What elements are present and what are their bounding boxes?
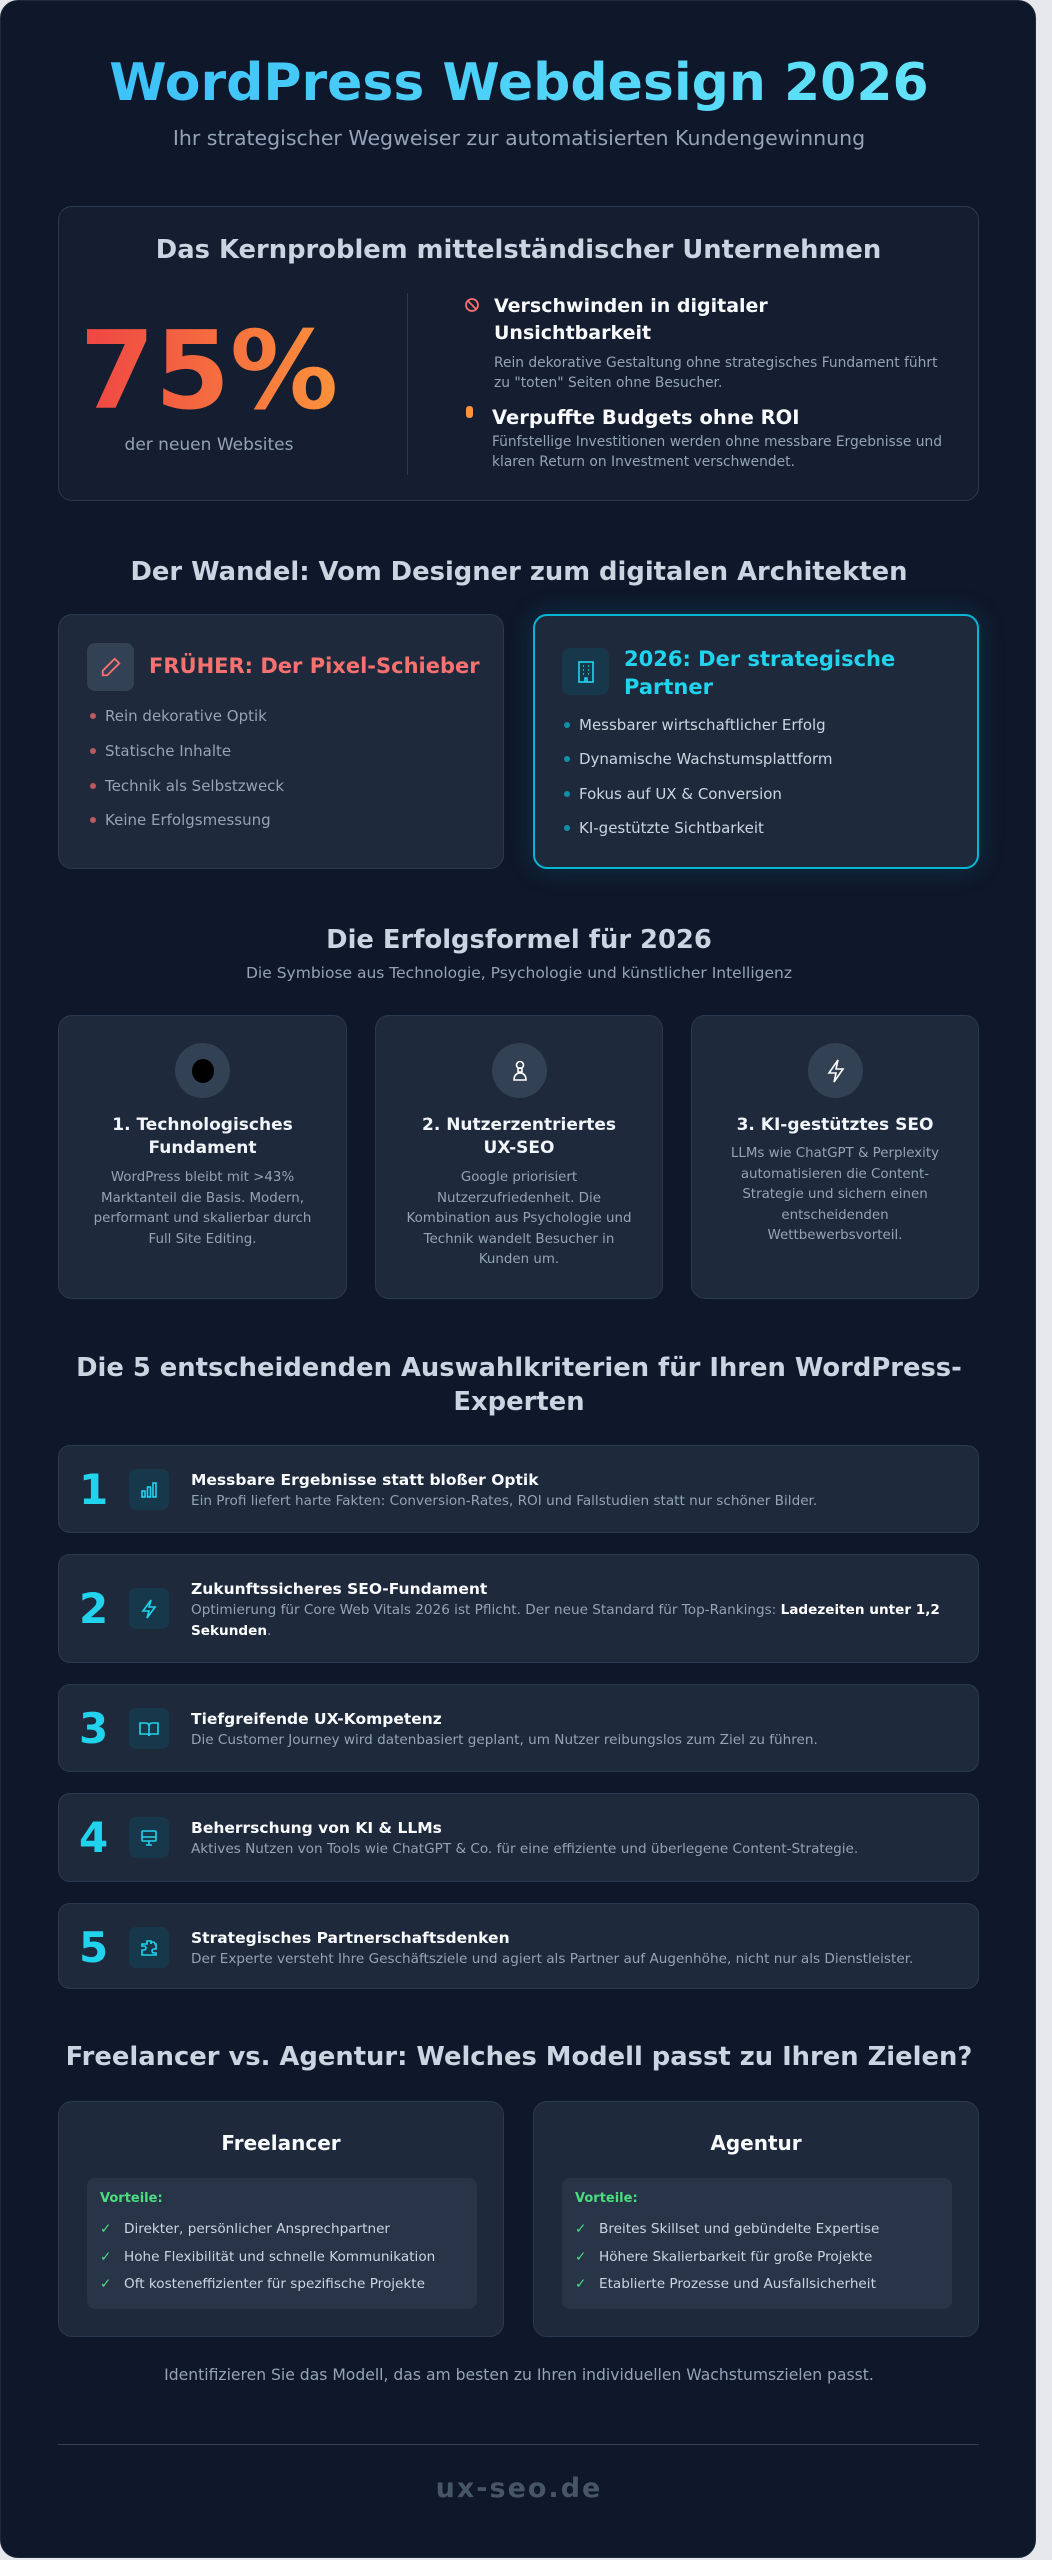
panel: agentur — [533, 2101, 979, 2337]
card: ux-seo — [375, 1015, 663, 1299]
stat: 75%: der neuen Websites — [125, 435, 293, 455]
row 5: Der Experte versteht Ihre Geschäftsziele und agiert als Partner auf Augenhöhe, nicht nur als Dienstleister. — [191, 1951, 913, 1967]
panel: 2026: Messbarer wirtschaftlicher Erfolg — [579, 716, 826, 734]
card: ki-seo: 3. KI-gestütztes SEO — [737, 1115, 933, 1135]
advantages box: Vorteile: — [575, 2191, 638, 2206]
card: ux-seo: 2. Nutzerzentriertes — [422, 1115, 616, 1135]
title: 2026: Der strategische Partner — [624, 647, 895, 699]
icon: monitor — [129, 1817, 169, 1858]
row 5: Strategisches Partnerschaftsdenken — [191, 1929, 510, 1947]
row 2: Zukunftssicheres SEO-Fundament — [191, 1580, 487, 1598]
card: technology: 1. Technologisches — [112, 1115, 293, 1135]
title: WordPress Webdesign 2026 — [109, 53, 929, 113]
row 2 — [58, 1554, 979, 1663]
panel: früher — [58, 614, 504, 869]
advantages box: Höhere Skalierbarkeit für große Projekte — [599, 2249, 872, 2265]
advantages box: Breites Skillset und gebündelte Expertise — [599, 2221, 879, 2237]
row 5 — [58, 1903, 979, 1989]
row 4: Aktives Nutzen von Tools wie ChatGPT & Co. für eine effiziente und überlegene Content-Strategie. — [191, 1841, 858, 1857]
panel heading: Das Kernproblem mittelständischer Unternehmen — [156, 235, 881, 265]
card: ki-seo — [691, 1015, 979, 1299]
item: budgets — [466, 406, 942, 470]
panel: 2026: Dynamische Wachstumsplattform — [579, 750, 833, 768]
panel: früher: Technik als Selbstzweck — [105, 777, 284, 795]
panel: früher: Keine Erfolgsmessung — [105, 811, 271, 829]
panel: 2026 — [533, 614, 979, 869]
subheading: Die Symbiose aus Technologie, Psychologie und künstlicher Intelligenz — [246, 964, 792, 982]
icon: chart — [129, 1469, 169, 1510]
panel: 2026: Fokus auf UX & Conversion — [579, 785, 782, 803]
row 5: 5 — [79, 1923, 108, 1972]
row 1: Ein Profi liefert harte Fakten: Conversion-Rates, ROI und Fallstudien statt nur schöner Bilder. — [191, 1493, 817, 1509]
row 3: 3 — [79, 1704, 108, 1753]
panel: core problem — [58, 206, 979, 501]
advantages box: Etablierte Prozesse und Ausfallsicherheit — [599, 2276, 876, 2292]
row 1: Messbare Ergebnisse statt bloßer Optik — [191, 1471, 539, 1489]
icon: prohibited — [465, 298, 479, 312]
advantages box: Vorteile: — [100, 2191, 163, 2206]
icon: building — [562, 648, 609, 695]
icon: book — [129, 1708, 169, 1749]
advantages box — [562, 2178, 952, 2309]
item: invisibility — [465, 295, 938, 391]
row 4: 4 — [79, 1813, 108, 1862]
card: ux-seo: Google priorisiert Nutzerzufriedenheit. Die Kombination aus Psychologie und Technik wandelt Besucher in Kunden um. — [406, 1170, 631, 1267]
card: technology: WordPress bleibt mit >43% Marktanteil die Basis. Modern, performant und skalierbar durch Full Site Editing. — [94, 1170, 311, 1247]
panel: freelancer: Freelancer — [221, 2131, 341, 2155]
row 1: 1 — [79, 1465, 108, 1514]
icon: user — [492, 1043, 547, 1098]
row 3: Die Customer Journey wird datenbasiert geplant, um Nutzer reibungslos zum Ziel zu führen. — [191, 1732, 818, 1748]
icon: bolt — [129, 1588, 169, 1629]
icon: money — [466, 406, 473, 418]
heading: Freelancer vs Agentur: Freelancer vs. Agentur: Welches Modell passt zu Ihren Zielen? — [66, 2042, 972, 2072]
stat: 75%: 75% — [80, 309, 338, 434]
footer brand: ux-seo.de — [436, 2473, 602, 2504]
card: technology: Fundament — [148, 1138, 257, 1158]
closing note: Identifizieren Sie das Modell, das am besten zu Ihren individuellen Wachstumszielen passt. — [164, 2366, 874, 2384]
row 3: Tiefgreifende UX-Kompetenz — [191, 1710, 442, 1728]
bullet list — [90, 707, 284, 829]
card: ki-seo: LLMs wie ChatGPT & Perplexity automatisieren die Content-Strategie und sichern einen entscheidenden Wettbewerbsvorteil. — [731, 1146, 939, 1243]
heading: 5 Kriterien: Die 5 entscheidenden Auswahlkriterien für Ihren WordPress-Experten — [76, 1353, 962, 1417]
title: FRÜHER: Der Pixel-Schieber — [149, 654, 480, 678]
panel: früher: Statische Inhalte — [105, 742, 231, 760]
panel: 2026: KI-gestützte Sichtbarkeit — [579, 819, 764, 837]
icon: pencil — [87, 643, 134, 691]
panel: core problem: Fünfstellige Investitionen werden ohne messbare Ergebnisse und klaren Return on Investment verschwendet. — [492, 434, 942, 470]
card: technology — [58, 1015, 347, 1299]
row 2: Optimierung für Core Web Vitals 2026 ist Pflicht. Der neue Standard für Top-Rankings: Ladezeiten unter 1,2 Sekunden. — [191, 1602, 940, 1639]
panel: früher: Rein dekorative Optik — [105, 707, 267, 725]
bullet list — [564, 716, 833, 837]
panel: core problem: Rein dekorative Gestaltung ohne strategisches Fundament führt zu "toten" Seiten ohne Besucher. — [494, 355, 938, 391]
heading: Der Wandel: Der Wandel: Vom Designer zum digitalen Architekten — [131, 557, 907, 587]
icon: puzzle — [129, 1927, 169, 1968]
icon: lightning — [808, 1043, 863, 1098]
advantages box: Direkter, persönlicher Ansprechpartner — [124, 2221, 390, 2237]
panel: agentur: Agentur — [710, 2131, 802, 2155]
panel: core problem: Verschwinden in digitaler Unsichtbarkeit — [494, 295, 768, 344]
advantages box — [87, 2178, 477, 2309]
heading: Erfolgsformel: Die Erfolgsformel für 2026 — [326, 925, 712, 955]
panel: core problem: Verpuffte Budgets ohne ROI — [492, 406, 799, 429]
row 4: Beherrschung von KI & LLMs — [191, 1819, 442, 1837]
advantages box: Oft kosteneffizienter für spezifische Projekte — [124, 2276, 425, 2292]
row 4 — [58, 1793, 979, 1882]
panel: freelancer — [58, 2101, 504, 2337]
row 1 — [58, 1445, 979, 1533]
card: ux-seo: UX-SEO — [484, 1138, 554, 1158]
row 3 — [58, 1684, 979, 1772]
subtitle: Ihr strategischer Wegweiser zur automatisierten Kundengewinnung — [173, 126, 865, 150]
advantages box: Hohe Flexibilität und schnelle Kommunikation — [124, 2249, 435, 2265]
icon: wordpress — [175, 1043, 230, 1098]
row 2: 2 — [79, 1584, 108, 1633]
